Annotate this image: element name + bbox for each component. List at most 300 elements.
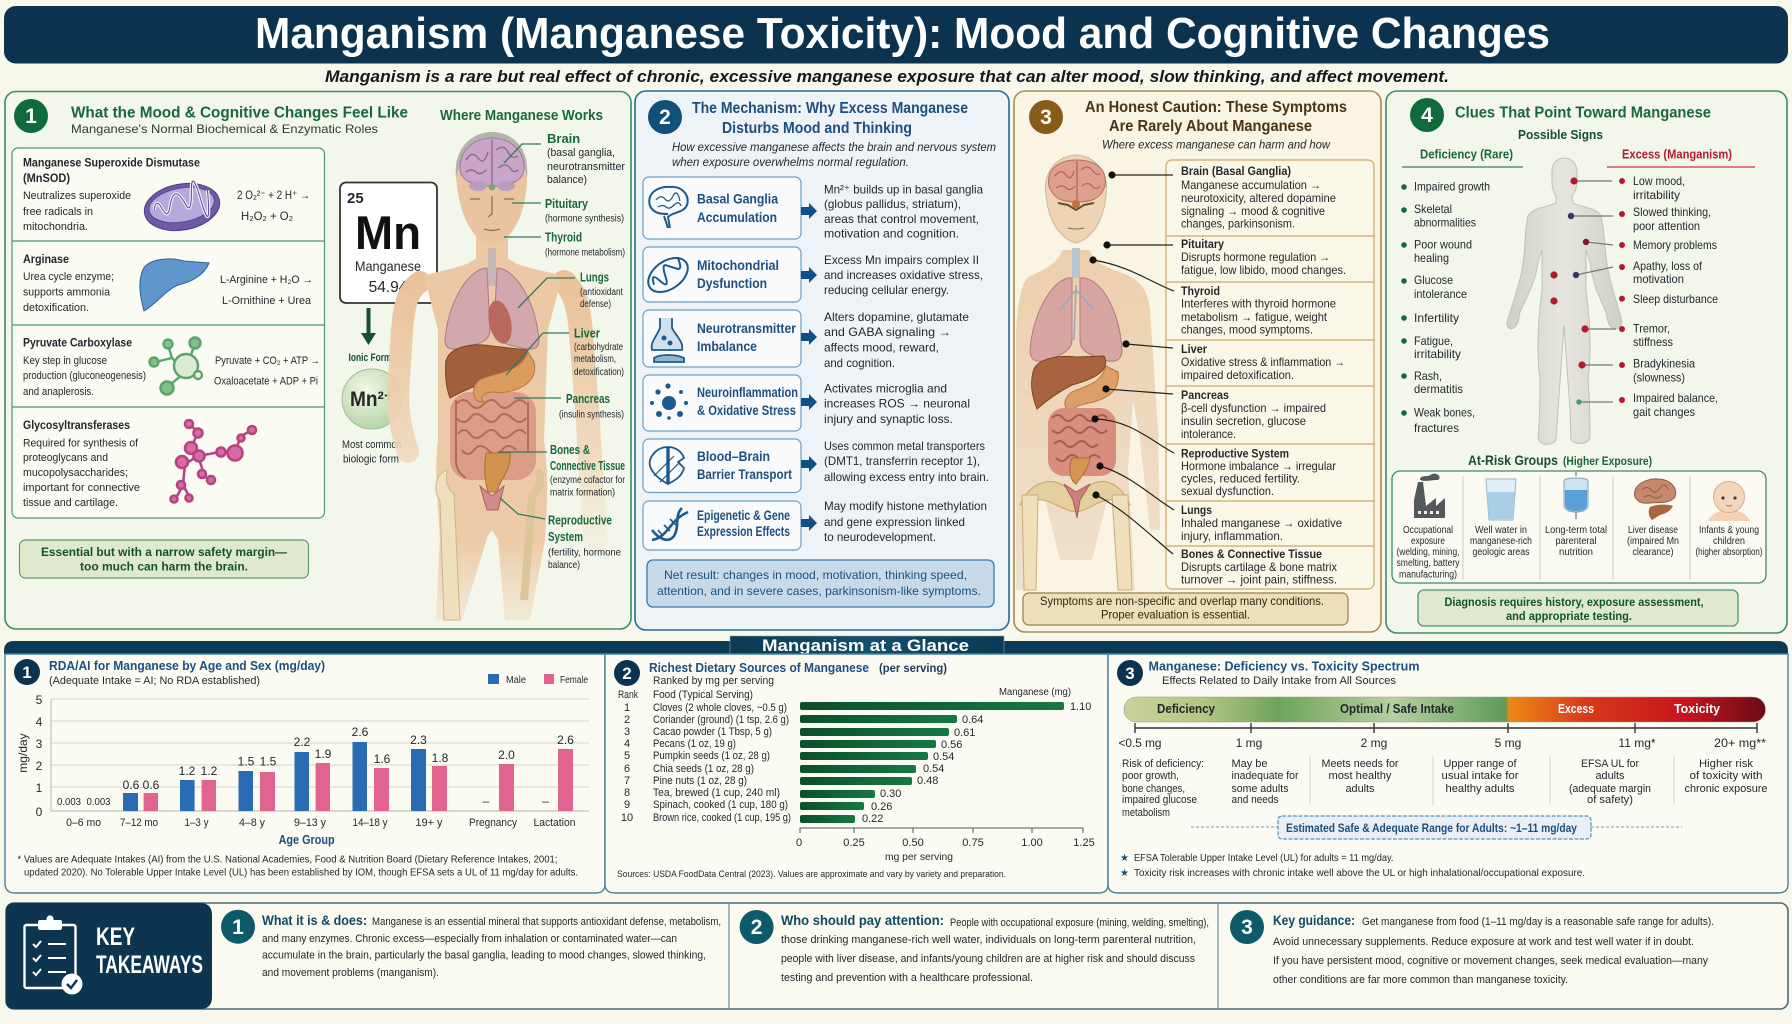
label: lungs [580,270,623,310]
enzyme: Arginase: detoxification. [23,302,89,314]
horizontal bar chart: 0.50 [902,837,924,849]
intake descriptions: adults [1596,770,1625,782]
panel 3: an honest caution [1014,91,1381,632]
deficiency column: Poor wound [1414,238,1472,252]
enzyme: Arginase: L-Arginine + H₂O → [220,274,313,286]
enzyme: Glycosyltransferases: tissue and cartilage. [23,497,118,509]
key takeaways badge: TAKEAWAYS [96,951,203,979]
number badge [1117,660,1143,686]
takeaway 3 [1230,910,1714,986]
food ranking table: Pine nuts (1 oz, 28 g) [653,775,747,787]
excess column: Low mood, [1633,174,1685,188]
food ranking table: 1 [624,702,630,714]
title: Manganism (Manganese Toxicity): Mood and Cognitive Changes [255,9,1550,58]
section band: manganism at a glance: Manganism at a Glance [762,636,969,655]
panel 2 intro: when exposure overwhelms normal regulation. [672,155,909,169]
description: and cognition. [824,356,895,370]
spectrum notes [1120,853,1585,879]
deficiency column: Rash, [1414,369,1442,383]
description: May modify histone methylation [824,499,987,513]
takeaway 1: What it is & does: [262,912,367,928]
enzyme: Glycosyltransferases [23,418,140,509]
excess column: Tremor, [1633,322,1670,336]
group: infants and young children: Infants & young [1699,525,1759,536]
excess column: stiffness [1633,335,1673,349]
intake descriptions: of safety) [1587,794,1633,806]
mechanism: mitochondrial dysfunction: Mitochondrial [697,257,779,273]
description [824,382,970,426]
number badge 3 [1029,100,1063,134]
horizontal bar chart: 1.00 [1021,837,1043,849]
horizontal bar chart: 0.26 [871,801,892,813]
excess column: Sleep disturbance [1633,292,1718,306]
description [824,499,987,544]
callout: non-specific symptoms: Symptoms are non-specific and overlap many conditions. [1040,594,1324,608]
symptom: brain: Brain (Basal Ganglia) [1181,164,1291,178]
heading: where manganese works: Where Manganese Works [440,107,603,124]
intake scale: 20+ mg** [1714,736,1766,750]
excess column [1607,146,1755,419]
symptom: reproductive system: cycles, reduced fertility. [1181,472,1300,486]
icon: clipboard checklist [24,915,82,994]
bar chart: 1 [36,781,43,795]
arrow [801,394,817,410]
symptom: bones and connective tissue: Disrupts cartilage & bone matrix [1181,560,1337,574]
intake scale: 11 mg* [1618,736,1656,750]
intake scale [1118,723,1766,750]
leader lines with dots [1089,171,1174,554]
ion caption: biologic form [343,454,399,466]
symptom: reproductive system [1181,446,1336,498]
panel 3 heading: An Honest Caution: These Symptoms [1085,99,1347,116]
safe range callout: Estimated Safe & Adequate Range for Adults: ~1–11 mg/day [1286,821,1577,835]
takeaway 2 [740,910,1209,984]
ionic form label: Ionic Form [348,352,392,364]
symptom: pituitary: Disrupts hormone regulation → [1181,250,1330,264]
intake descriptions: some adults [1232,783,1289,795]
label: lungs: defense) [580,299,611,310]
intake descriptions [1122,756,1768,819]
table header: Rank [618,689,638,701]
symptom: bones and connective tissue: Bones & Connective Tissue [1181,547,1322,561]
deficiency column: Skeletal [1414,202,1452,216]
intake descriptions: Upper range of [1444,758,1517,770]
panel 2 heading: Disturbs Mood and Thinking [722,120,912,137]
takeaway 2: People with occupational exposure (mining, welding, smelting), [950,917,1209,929]
symptom: pituitary [1181,237,1346,277]
arrow [801,456,817,472]
mechanism: epigenetic and gene expression effects: Epigenetic & Gene [697,507,790,523]
number badge: 2 [622,664,632,683]
horizontal bar chart [796,701,1095,863]
intake descriptions: Higher risk [1699,758,1754,770]
intake scale: 5 mg [1495,736,1521,750]
mechanism: neurotransmitter imbalance: Imbalance [697,338,757,354]
horizontal bar chart: 1.10 [1070,701,1091,713]
legend: Male [506,675,526,686]
ion badge: Mn2+ [342,369,402,429]
key takeaways strip [6,903,1788,1009]
arrow [801,515,817,531]
group: occupational exposure: smelting, battery [1396,558,1460,569]
excess column: Apathy, loss of [1633,259,1703,273]
enzyme: MnSOD [23,156,310,233]
food ranking table: 3 [624,726,630,738]
symptom: bones and connective tissue: turnover → joint pain, stiffness. [1181,573,1337,587]
symptom: reproductive system: sexual dysfunction. [1181,484,1274,498]
description: areas that control movement, [824,212,979,226]
label: pituitary [545,196,624,225]
description: and increases oxidative stress, [824,268,983,282]
enzyme: Arginase: Arginase [23,252,69,266]
chart title [649,660,947,687]
food ranking table: Cloves (2 whole cloves, ~0.5 g) [653,702,787,714]
deficiency column: Deficiency (Rare) [1420,146,1513,162]
horizontal bar chart: 0.54 [923,763,944,775]
intake descriptions: chronic exposure [1684,783,1768,795]
deficiency column: healing [1414,251,1449,265]
bar chart: 1.2 [179,764,196,778]
label: reproductive system [548,512,621,571]
group: infants and young children: children [1713,536,1745,547]
number badge [14,659,40,685]
food ranking table: Pecans (1 oz, 19 g) [653,738,736,750]
horizontal bar chart: mg per serving [885,852,953,863]
symptom: lungs [1181,503,1342,543]
description: and gene expression linked [824,515,965,529]
chart title: RDA/AI for Manganese by Age and Sex (mg/day) [49,658,325,673]
enzyme: Arginase: Urea cycle enzyme; [23,271,114,283]
enzyme: Pyruvate Carboxylase [23,336,320,398]
intake descriptions: Meets needs for [1322,758,1399,770]
enzyme: Glycosyltransferases: proteoglycans and [23,452,108,464]
mechanism: neurotransmitter imbalance [643,310,801,367]
label: thyroid [545,230,625,258]
bar chart: 0.003 [57,797,81,808]
bar chart: 7–12 mo [120,817,158,829]
label: bones and connective tissue: Bones & [550,442,590,457]
panel 4 heading [1455,104,1711,142]
takeaway 3: Get manganese from food (1–11 mg/day is a reasonable safe range for adults). [1362,916,1714,928]
panel 2 intro [672,140,996,169]
number badge 2 [648,100,682,134]
group: well water: Well water in [1475,525,1527,536]
section band: manganism at a glance [4,636,1788,656]
takeaway 2: people with liver disease, and infants/young children are at higher risk and should discuss [781,953,1195,965]
number badge: 3 [1125,664,1135,683]
excess column: Bradykinesia [1633,356,1695,370]
group: well water [1470,479,1532,558]
takeaway 1: and movement problems (manganism). [262,967,439,979]
panel 4 heading: Possible Signs [1518,127,1603,142]
intake scale: 1 mg [1236,736,1262,750]
label: thyroid: (hormone metabolism) [545,248,625,258]
excess column: (slowness) [1633,370,1685,384]
bar chart: 2.6 [352,725,369,739]
takeaway 2: Who should pay attention: [781,912,944,928]
mechanism: blood-brain barrier transport: Barrier Transport [697,466,792,482]
deficiency column: Glucose [1414,273,1453,287]
element card: manganese: Manganese [355,258,421,274]
chart title: Richest Dietary Sources of Manganese [649,660,869,675]
group: liver disease: clearance) [1632,547,1674,558]
bar chart: – [542,794,549,808]
food ranking table: 10 [621,812,633,824]
group: parenteral nutrition: nutrition [1559,547,1593,558]
spectrum notes: ★ [1120,868,1129,879]
excess column: gait changes [1633,405,1695,419]
intake descriptions: bone changes, [1122,783,1185,795]
intake descriptions: healthy adults [1446,783,1515,795]
intake descriptions: of toxicity with [1690,770,1762,782]
number badge 1: 1 [25,105,37,128]
chart title: Ranked by mg per serving [653,675,774,687]
symptom: pancreas: intolerance. [1181,427,1236,441]
anatomical figure 3 [1016,155,1160,590]
chart title: Effects Related to Daily Intake from All Sources [1162,675,1397,687]
symptom: reproductive system: Reproductive System [1181,446,1289,460]
takeaway 2: those drinking manganese-rich well water, individuals on long-term parenteral nutrition, [781,934,1196,946]
number badge: 1 [22,663,32,682]
element card: manganese [340,182,437,303]
number badge 1 [14,99,48,133]
enzyme: MnSOD: Manganese Superoxide Dismutase [23,156,200,170]
at-risk groups box [1392,471,1766,583]
label: pancreas [559,391,624,420]
food ranking table: 7 [624,775,630,787]
chart title: (Adequate Intake = AI; No RDA established) [49,675,260,687]
group: liver disease: (impaired Mn [1627,536,1679,547]
bar chart: 0–6 mo [66,817,101,829]
description: Excess Mn impairs complex II [824,253,979,267]
enzyme: Arginase: L-Ornithine + Urea [222,295,312,307]
number badge 3: 3 [1040,106,1052,129]
anatomical figure 1 [398,132,596,620]
chart panel 2: richest dietary sources [605,654,1108,893]
enzyme: Glycosyltransferases: mucopolysaccharides; [23,467,128,479]
number badge 2: 2 [659,106,671,129]
spectrum bar: Toxicity [1674,701,1721,716]
chart panel 3: deficiency vs toxicity spectrum [1108,654,1788,893]
element card: manganese: 25 [347,190,364,207]
at-risk heading [1468,452,1652,468]
food ranking table: 5 [624,750,630,762]
bar chart: 2 [36,759,43,773]
subtitle: Manganism is a rare but real effect of chronic, excessive manganese exposure that can alter mood, slow thinking, and affect movement. [325,67,1449,86]
mechanism: mitochondrial dysfunction [642,247,801,302]
excess column: Slowed thinking, [1633,205,1711,219]
callout: net result [647,560,994,607]
callout: net result: attention, and in severe cases, parkinsonism-like symptoms. [657,584,981,598]
description: (globus pallidus, striatum), [824,197,961,211]
group: occupational exposure: Occupational [1403,525,1453,536]
enzyme: MnSOD: mitochondria. [23,221,88,233]
enzyme: MnSOD: (MnSOD) [23,171,70,185]
description [824,310,969,370]
group: liver disease: Liver disease [1628,525,1678,536]
at-risk heading: (Higher Exposure) [1563,456,1652,468]
description: Mn²⁺ builds up in basal ganglia [824,182,983,196]
symptom: lungs: injury, inflammation. [1181,529,1283,543]
takeaway 1: 1 [232,916,244,939]
symptom: thyroid [1181,284,1336,336]
ion caption: Most common [342,439,402,451]
mechanism: neuroinflammation and oxidative stress: & Oxidative Stress [697,402,796,418]
takeaway 3: 3 [1241,916,1253,939]
horizontal bar chart: 0.25 [843,837,865,849]
bar chart: 0.003 [86,797,111,808]
horizontal bar chart: 0.56 [941,739,962,751]
food ranking table [621,702,791,824]
description: affects mood, reward, [824,340,939,354]
bar chart: 1.5 [238,755,255,769]
label: reproductive system: balance) [548,560,580,571]
enzyme: Pyruvate Carboxylase: production (gluconeogenesis) [23,370,146,382]
deficiency column: Weak bones, [1414,405,1475,419]
label: bones and connective tissue: Connective Tissue [550,458,625,473]
intake descriptions: May be [1232,758,1268,770]
intake descriptions: impaired glucose [1122,794,1197,806]
bar chart: 2.2 [294,735,311,749]
label: reproductive system: System [548,529,583,544]
label: bones and connective tissue: matrix formation) [550,488,615,498]
label: lungs: Lungs [580,270,609,285]
intake descriptions: most healthy [1328,770,1392,782]
mechanism: neurotransmitter imbalance: Neurotransmitter [697,320,796,336]
group: occupational exposure [1396,474,1460,580]
table header: Food (Typical Serving) [653,689,753,701]
enzyme: Glycosyltransferases: Required for synthesis of [23,438,139,450]
enzyme table [12,148,324,518]
deficiency column: fractures [1414,421,1459,435]
label: reproductive system: Reproductive [548,512,612,528]
deficiency column: irritability [1414,347,1461,361]
spectrum bar [1124,697,1766,722]
mechanism: basal ganglia accumulation: Accumulation [697,209,777,225]
bar chart: 19+ y [416,817,443,829]
bar chart: 1.8 [432,751,449,765]
food ranking table: 2 [624,714,630,726]
label: pancreas: Pancreas [566,391,610,406]
bar chart: 5 [36,693,43,707]
bar chart: 4–8 y [239,817,265,829]
symptom: thyroid: Thyroid [1181,284,1220,298]
enzyme: Arginase [23,252,313,314]
group: well water: manganese-rich [1470,536,1532,547]
bar chart: 0 [36,805,43,819]
panel 1: what the changes feel like [5,92,631,629]
intake scale: <0.5 mg [1118,736,1162,750]
panel 1 heading [71,104,408,136]
description: injury and synaptic loss. [824,412,953,426]
excess column: motivation [1633,272,1684,286]
group: well water: geologic areas [1472,547,1530,558]
symptom: brain: signaling → mood & cognitive [1181,204,1325,218]
label: bones and connective tissue [550,442,626,498]
group: occupational exposure: manufacturing) [1399,570,1457,580]
intake descriptions: and needs [1232,794,1279,806]
legend [488,674,588,686]
panel 3 heading: Where excess manganese can harm and how [1102,138,1331,152]
symptom: brain [1181,164,1336,230]
description: allowing excess entry into brain. [824,470,989,484]
excess column: poor attention [1633,219,1700,233]
intake descriptions: (adequate margin [1569,783,1651,795]
icon: liver [140,259,209,311]
food ranking table: Coriander (ground) (1 tsp, 2.6 g) [653,714,789,726]
spectrum bar: Excess [1558,701,1594,716]
callout: diagnosis [1418,590,1738,626]
footnote: * Values are Adequate Intakes (AI) from the U.S. National Academies, Food & Nutrition Board (Dietary Reference Intakes, 2001; [18,855,558,866]
bar chart: mg/day [16,733,30,773]
symptom: liver [1181,342,1345,382]
description: increases ROS → neuronal [824,396,970,410]
label: pituitary: (hormone synthesis) [545,214,624,225]
group: occupational exposure: exposure [1411,536,1445,547]
spectrum notes: Toxicity risk increases with chronic intake well above the UL or high inhalational/occupational exposure. [1134,868,1585,879]
bar chart: 9–13 y [294,817,326,829]
arrow: to ionic form [361,308,376,345]
deficiency column: dermatitis [1414,382,1463,396]
legend: Female [560,675,588,686]
enzyme: Pyruvate Carboxylase: Oxaloacetate + ADP + Pi [214,376,318,388]
bar chart: Lactation [534,817,576,829]
deficiency column: Infertility [1414,311,1459,325]
bar chart: 0.6 [143,778,160,792]
callout: non-specific symptoms: Proper evaluation is essential. [1101,608,1250,622]
key takeaways badge: KEY [96,923,135,951]
horizontal bar chart: 0.48 [917,775,938,787]
label: liver: (carbohydrate [574,342,623,353]
panel 2 heading [692,100,968,137]
takeaway 3: Key guidance: [1273,912,1355,928]
group: parenteral nutrition [1545,472,1607,558]
enzyme: Pyruvate Carboxylase: and anaplerosis. [23,386,94,398]
chart title: Manganese: Deficiency vs. Toxicity Spectrum [1148,659,1420,674]
title [4,6,1788,64]
panel 3 heading: Are Rarely About Manganese [1109,118,1312,135]
label: thyroid: Thyroid [545,230,582,245]
intake scale: 2 mg [1361,736,1387,750]
callout: net result: Net result: changes in mood, motivation, thinking speed, [664,568,967,582]
ion badge: Mn2+: Mn²⁺ [350,388,394,411]
food ranking table: 4 [624,738,630,750]
enzyme: MnSOD: Neutralizes superoxide [23,190,131,202]
symptom: brain: Manganese accumulation → [1181,178,1321,192]
mechanism: neuroinflammation and oxidative stress [643,375,801,431]
label: brain: neurotransmitter [547,161,625,173]
bar chart: 1.2 [201,764,218,778]
symptom: brain: changes, parkinsonism. [1181,216,1295,230]
intake descriptions: EFSA UL for [1581,758,1639,770]
takeaway 1: and many enzymes. Chronic excess—especially from inhalation or contaminated water—can [262,933,677,945]
horizontal bar chart: 0.75 [962,837,984,849]
group: infants and young children [1696,482,1762,558]
organ leader lines and labels [498,131,626,571]
description: Activates microglia and [824,382,947,396]
icon: mitochondrion [140,177,223,236]
description: to neurodevelopment. [824,530,936,544]
food ranking table: Pumpkin seeds (1 oz, 28 g) [653,750,770,762]
gray body figure with markers [1507,158,1622,444]
takeaway 3: other conditions are far more common than manganese toxicity. [1273,974,1568,986]
description: reducing cellular energy. [824,283,949,297]
label: liver: metabolism, [574,354,616,365]
at-risk heading: At-Risk Groups [1468,452,1558,468]
callout: narrow safety margin [20,540,308,578]
label: pancreas: (insulin synthesis) [559,410,624,420]
icon: green molecule [150,338,202,394]
